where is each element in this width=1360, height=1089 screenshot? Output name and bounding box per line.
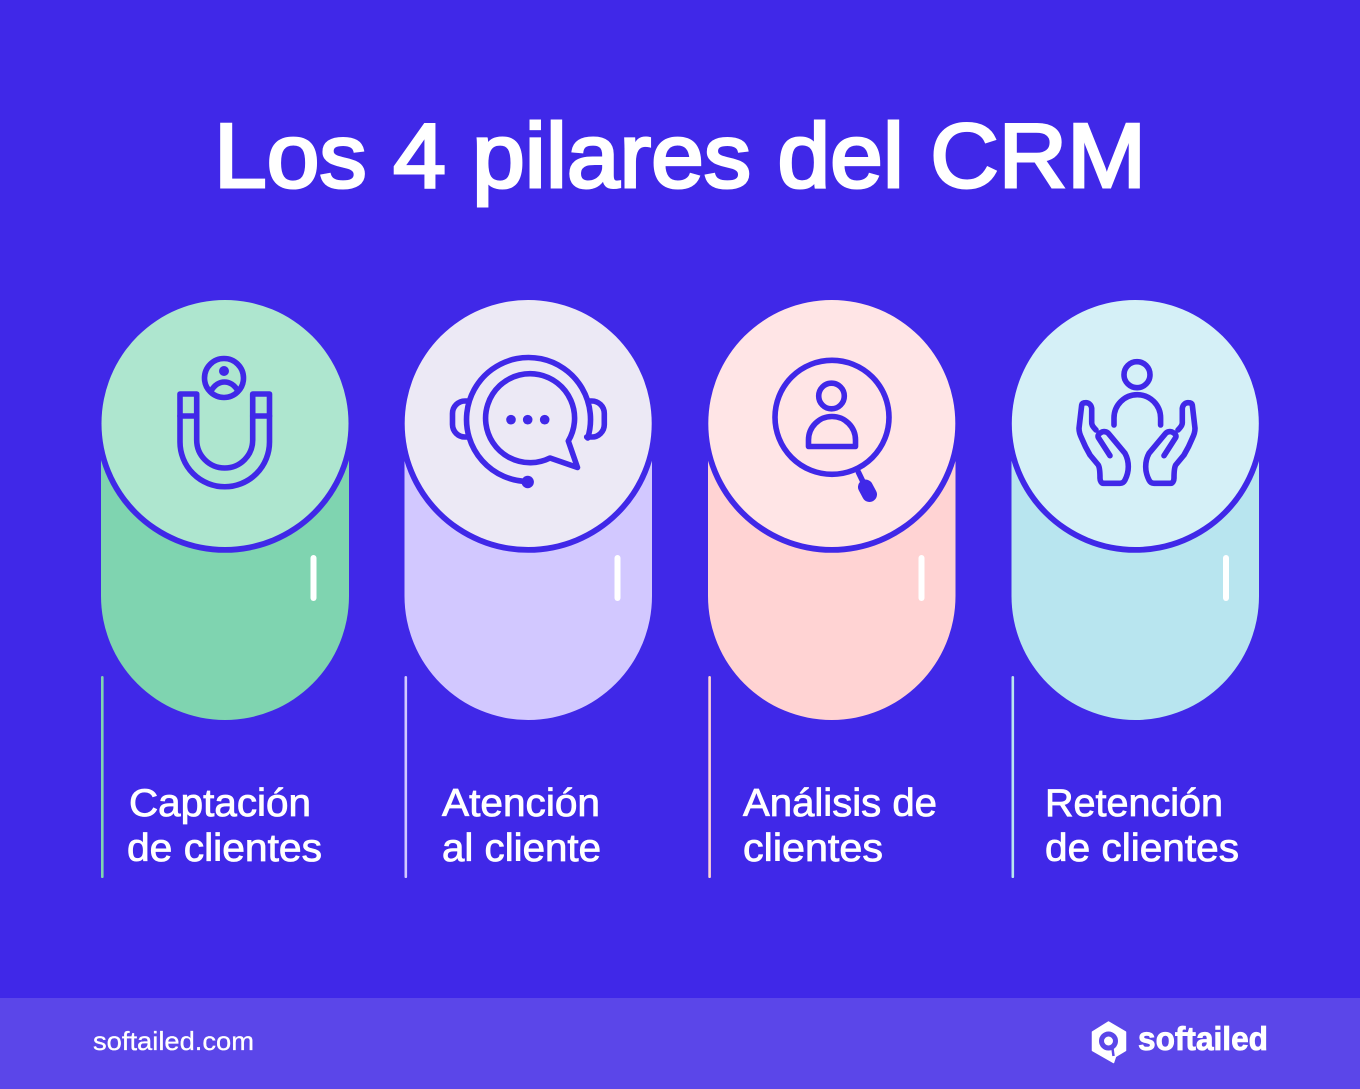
label: Captación	[129, 782, 311, 825]
pillar circle ring	[1012, 460, 1259, 553]
accent line	[404, 676, 407, 878]
white tick	[310, 555, 316, 601]
pillar body	[101, 460, 349, 720]
white tick	[1223, 555, 1229, 601]
footer url: softailed.com	[93, 1026, 254, 1056]
icon: magnet attracting customer	[180, 358, 270, 487]
label: al cliente	[442, 827, 601, 870]
label: Atención	[442, 782, 600, 825]
icon: customer under magnifier	[775, 360, 889, 494]
white tick	[918, 555, 924, 601]
accent line	[1012, 676, 1014, 878]
icon: softailed logo	[1092, 1022, 1126, 1062]
pillar circle ring	[708, 460, 956, 553]
label: de clientes	[127, 827, 322, 870]
white tick	[614, 555, 620, 601]
accent line	[708, 676, 711, 878]
panel: captación de clientes	[96, 294, 354, 878]
pillar circle	[708, 300, 955, 547]
pillar body	[404, 460, 652, 720]
icon: hands holding customer	[1079, 362, 1195, 483]
icon: headset chat bubble	[452, 358, 604, 488]
panel: retención de clientes	[1006, 294, 1265, 878]
pillar circle ring	[404, 460, 652, 553]
accent line	[101, 676, 104, 878]
pillar circle	[102, 300, 348, 547]
title: Los 4 pilares del CRM	[214, 106, 1146, 207]
label: Retención	[1045, 782, 1223, 825]
pillar circle	[1012, 300, 1259, 547]
pillar circle ring	[101, 460, 349, 553]
pillar circle	[405, 300, 652, 547]
label: de clientes	[1045, 827, 1239, 870]
panel: análisis de clientes	[702, 294, 961, 878]
label: Análisis de	[743, 782, 937, 825]
label: clientes	[743, 827, 883, 870]
pillar body	[708, 460, 956, 720]
logo wordmark: softailed	[1138, 1020, 1268, 1057]
panel: atención al cliente	[399, 294, 658, 878]
pillar body	[1012, 460, 1259, 720]
footer bar	[0, 998, 1360, 1089]
